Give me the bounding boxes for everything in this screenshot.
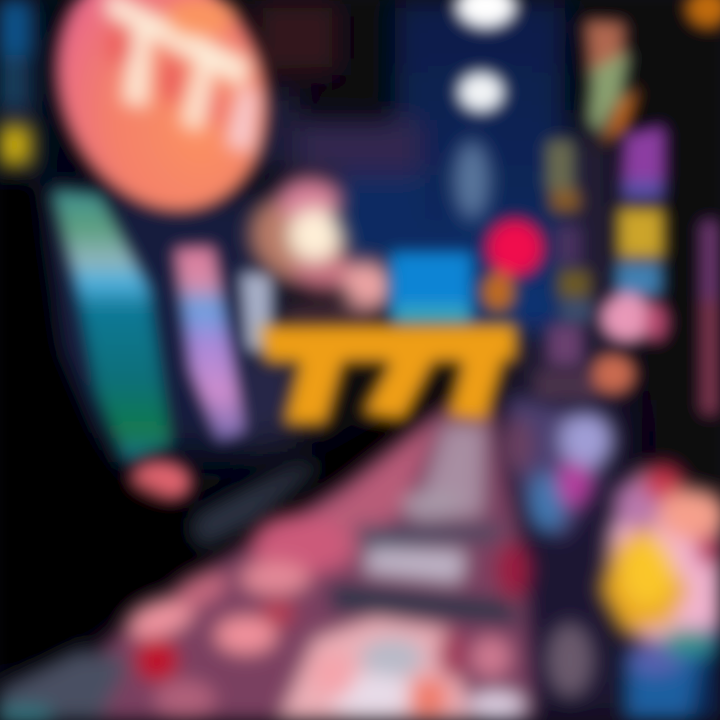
- panel: right neon strips: [535, 0, 720, 415]
- sign lettering glow: [104, 0, 258, 152]
- panel: yellow 777 sign: [260, 324, 516, 424]
- panel: blue central column: [240, 0, 565, 330]
- panel: pink and purple vertical sign: [174, 246, 272, 442]
- panel: top-left blue corner and yellow sign: [0, 0, 30, 164]
- panel: peach glowing blob: [234, 178, 403, 325]
- panel: red round sign: [22, 0, 302, 242]
- icon: red ball: [481, 219, 544, 312]
- panel: teal vertical sign: [52, 190, 190, 502]
- panel: lower right signs: [0, 395, 720, 720]
- panel: pink street floor: [0, 405, 535, 720]
- panel: cyan rectangle: [390, 252, 472, 325]
- icon: white lights: [454, 0, 516, 220]
- panel: black foreground counter: [0, 180, 445, 670]
